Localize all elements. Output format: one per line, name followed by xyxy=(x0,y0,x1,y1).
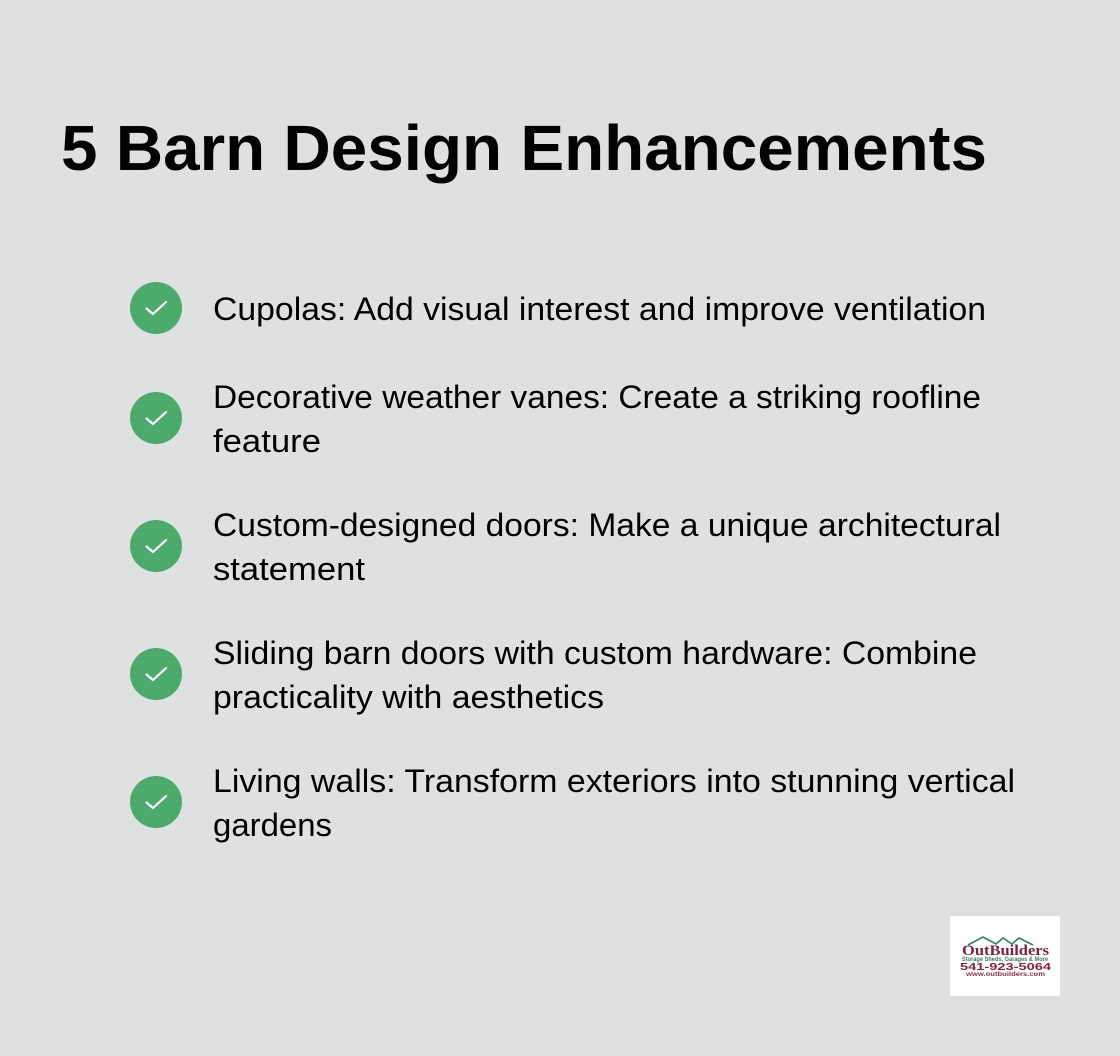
list item: weather vanes xyxy=(130,379,981,459)
list item: cupolas xyxy=(130,282,986,334)
title: 5 Barn Design Enhancements xyxy=(61,112,987,184)
item text: Sliding barn doors with custom hardware: Combine xyxy=(213,635,977,671)
item text: Living walls: Transform exteriors into stunning vertical xyxy=(213,763,1015,799)
logo tagline: Storage Sheds, Garages & More xyxy=(962,957,1049,963)
item text: Decorative weather vanes: Create a striking roofline xyxy=(213,379,981,415)
logo roofline xyxy=(968,937,1033,945)
icon: check badge xyxy=(130,776,182,828)
item text: gardens xyxy=(213,807,332,843)
logo: OutBuilders xyxy=(950,916,1060,996)
icon: check badge xyxy=(130,648,182,700)
item text: feature xyxy=(213,423,321,459)
logo name: OutBuilders xyxy=(962,943,1049,959)
item text: practicality with aesthetics xyxy=(213,679,604,715)
list item: sliding doors xyxy=(130,635,977,715)
logo phone: 541-923-5064 xyxy=(960,962,1052,973)
item text: Cupolas: Add visual interest and improve ventilation xyxy=(213,291,986,327)
list item: custom doors xyxy=(130,507,1001,587)
logo url: www.outbuilders.com xyxy=(965,972,1045,978)
icon: check badge xyxy=(130,520,182,572)
icon: check badge xyxy=(130,282,182,334)
item text: statement xyxy=(213,551,365,587)
icon: check badge xyxy=(130,392,182,444)
list item: living walls xyxy=(130,763,1015,843)
item text: Custom-designed doors: Make a unique architectural xyxy=(213,507,1001,543)
